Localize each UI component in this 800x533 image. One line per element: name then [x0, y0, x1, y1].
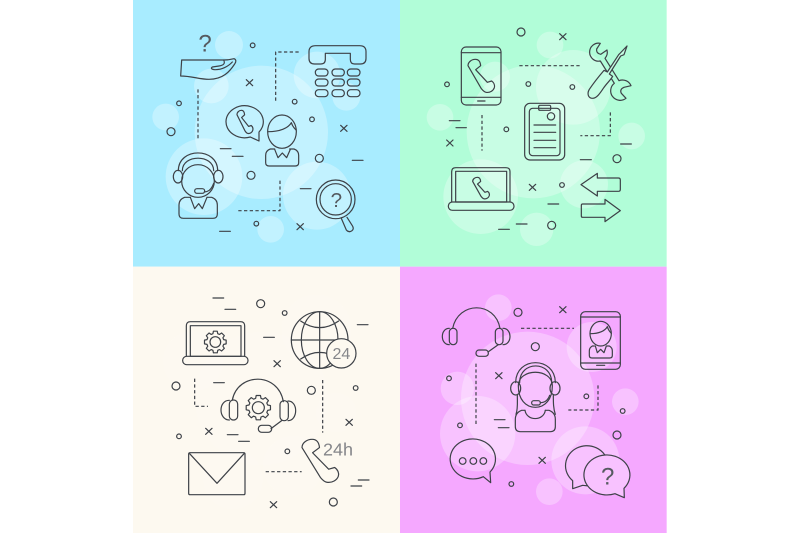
- icon: clipboard: [525, 103, 565, 160]
- dashed connectors pink: [476, 328, 598, 426]
- icon: two chat bubbles with question mark: ?: [601, 463, 614, 490]
- decorative marks pink: [447, 307, 625, 486]
- panel: green mobile and tools: [400, 0, 667, 267]
- icon: man avatar: [266, 115, 299, 166]
- panel: cream 24 hour support: [133, 267, 400, 533]
- icon: headset with gear: [221, 379, 296, 432]
- decorative marks green: [445, 28, 631, 229]
- dashed connectors green: [482, 66, 610, 151]
- icon: left arrow: [581, 173, 620, 196]
- icon: desk telephone keypad: [309, 46, 366, 97]
- icon: speech bubble with handset: [226, 106, 263, 141]
- icon: hand with question mark: [181, 30, 236, 79]
- icon: two chat bubbles with question mark: [566, 446, 630, 498]
- dashed connectors cream: [195, 379, 323, 472]
- icon: right arrow: [581, 199, 620, 222]
- dashed connectors blue: [198, 52, 299, 211]
- background bubbles cream: [163, 294, 356, 509]
- icon: laptop with handset: [448, 168, 514, 210]
- background bubbles green: [427, 32, 645, 246]
- icon: headset agent: [173, 153, 223, 218]
- icon: globe with 24 badge: [291, 312, 356, 368]
- icon: magnifier with question mark: [316, 180, 355, 232]
- icon: tablet with avatar: [581, 312, 620, 369]
- icon: globe with 24 badge: 24: [332, 346, 350, 363]
- icon: female headset agent: [511, 363, 560, 432]
- background bubbles blue: [152, 31, 360, 243]
- decorative marks blue: [167, 43, 363, 231]
- background bubbles pink: [440, 294, 639, 505]
- decorative marks cream: [172, 298, 369, 508]
- icon: laptop with gear: [183, 322, 248, 365]
- icon: headset: [442, 308, 510, 356]
- icon: magnifier with question mark: ?: [331, 189, 342, 212]
- icon: wrench and screwdriver: [588, 43, 631, 100]
- icon: handset with 24h label: [302, 439, 353, 482]
- panel: blue support contact: [133, 0, 400, 267]
- icon: tablet with handset: [461, 47, 501, 105]
- panel: pink chat and agent: [400, 267, 667, 533]
- icon: envelope: [189, 453, 245, 495]
- icon: chat bubble with dots: [450, 439, 495, 483]
- icon: handset with 24h label: 24h: [323, 440, 353, 460]
- icon: hand with question mark: ?: [198, 30, 212, 57]
